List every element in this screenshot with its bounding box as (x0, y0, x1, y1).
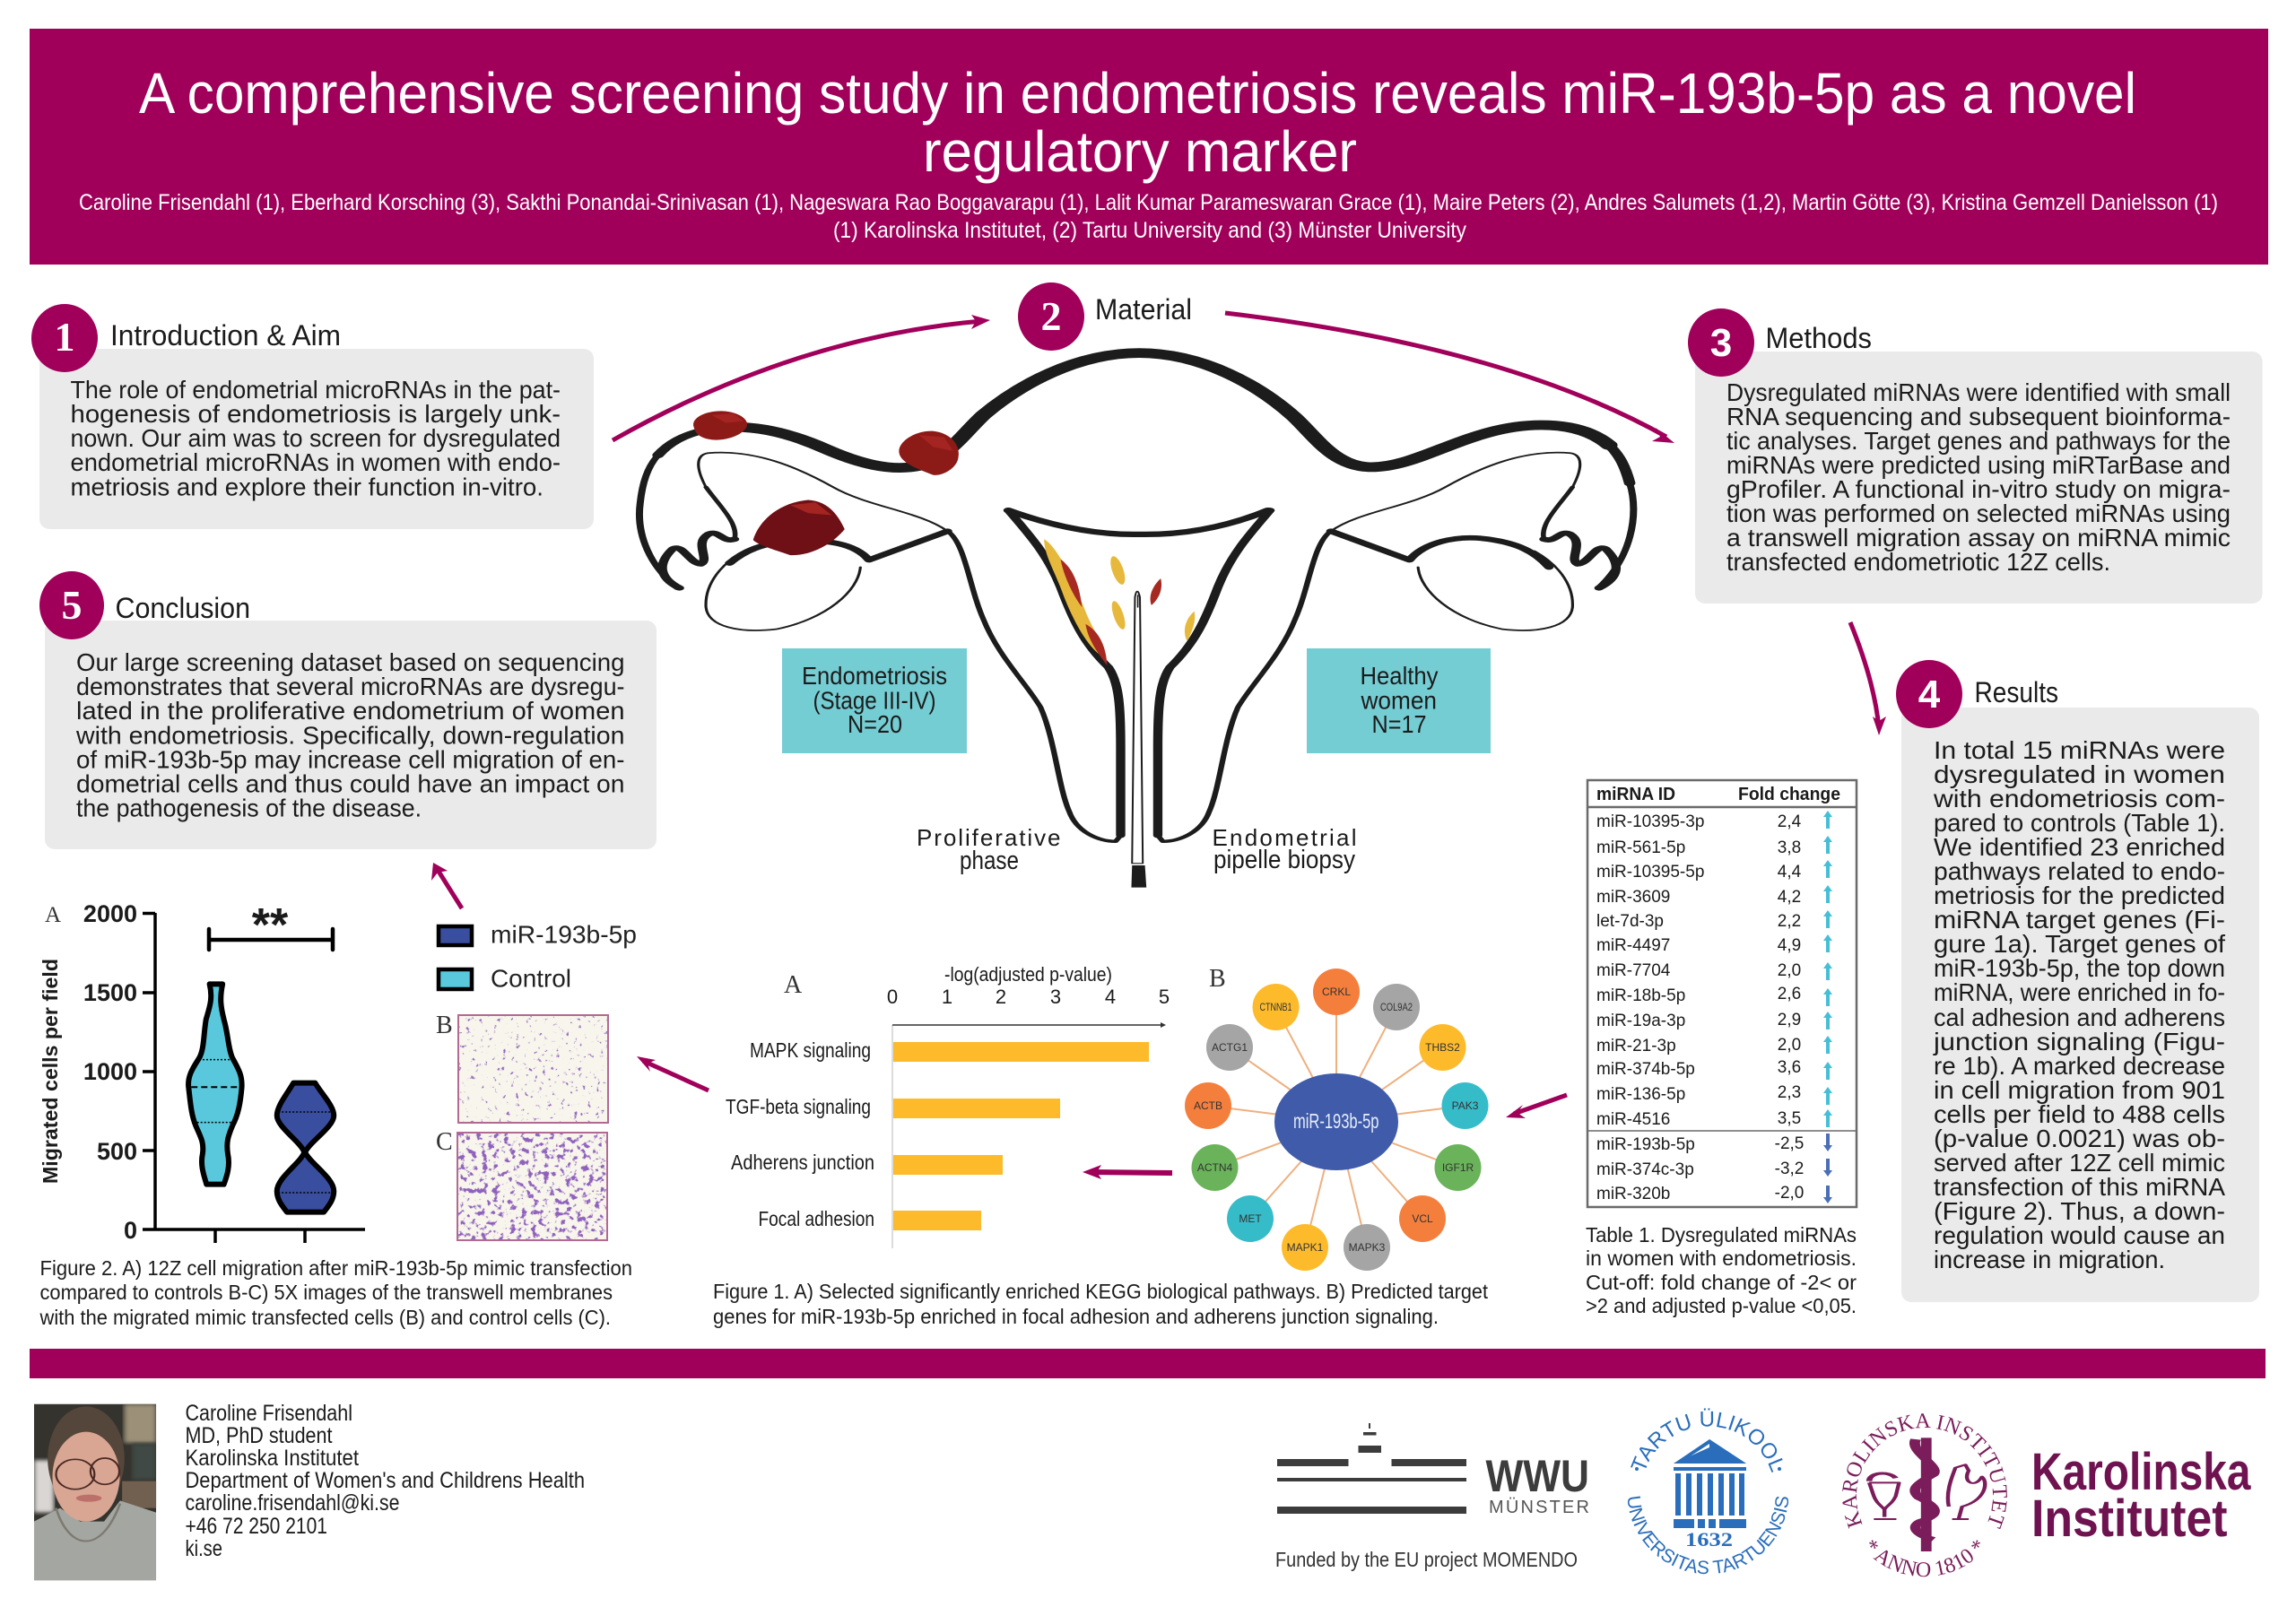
results text: miRNA target genes (Fi- (1934, 906, 2225, 934)
conclusion text: with endometriosis. Specifically, down-regulation (75, 721, 624, 750)
legend: miR-193b-5p (491, 920, 637, 949)
results text: with endometriosis com- (1933, 785, 2225, 812)
network hub (1274, 1073, 1398, 1170)
number badge 5: 5 (61, 582, 83, 628)
authors and affiliations: (1) Karolinska Institutet, (2) Tartu University and (3) Münster University (833, 218, 1466, 243)
logo: Karolinska Institutet seal: KAROLINSKA INSTITUTET (1842, 1413, 2007, 1530)
axis title: -log(adjusted p-value) (944, 963, 1112, 986)
membrane image B (436, 1012, 608, 1123)
gene node PAK3 (1442, 1082, 1489, 1129)
conclusion text: the pathogenesis of the disease. (76, 795, 422, 822)
gene node CRKL (1313, 969, 1360, 1015)
gene node ACTN4 (1191, 1144, 1238, 1191)
introduction text: metriosis and explore their function in-vitro. (70, 473, 544, 500)
table rows: 2,3 (1778, 1083, 1801, 1102)
conclusion text: lated in the proliferative endometrium of women (76, 697, 624, 725)
methods text (1726, 378, 2231, 576)
logo: WWU Münster: MÜNSTER (1489, 1498, 1589, 1517)
results text: miRNA, were enriched in fo- (1934, 978, 2225, 1006)
table rows: miR-193b-5p (1596, 1135, 1695, 1154)
logo: Karolinska Institutet seal (1842, 1413, 2007, 1577)
number badge 4: 4 (1918, 673, 1941, 717)
gene node VCL (1399, 1195, 1446, 1242)
network: miR-193b-5p target genes (1185, 965, 1489, 1271)
gene node VCL: VCL (1412, 1212, 1433, 1225)
figure 2 caption: compared to controls B-C) 5X images of the transwell membranes (39, 1281, 613, 1304)
header panel (30, 29, 2268, 265)
results text: pathways related to endo- (1934, 857, 2225, 885)
table rows: 2,4 (1778, 812, 1802, 831)
results text: (p-value 0.0021) was ob- (1934, 1125, 2225, 1152)
results text: re 1b). A marked decrease (1934, 1052, 2225, 1080)
results text: metriosis for the predicted (1934, 882, 2225, 909)
pipelle (1131, 591, 1146, 888)
down-regulation arrows (1823, 1134, 1832, 1203)
introduction text: The role of endometrial microRNAs in the pat- (70, 376, 561, 404)
table caption: Cut-off: fold change of -2< or (1586, 1271, 1857, 1294)
figure 2 caption (39, 1256, 632, 1329)
footer band (30, 1349, 2266, 1378)
contact details: +46 72 250 2101 (185, 1514, 327, 1539)
box: healthy group (1307, 648, 1491, 753)
conclusion text: of miR-193b-5p may increase cell migration of en- (76, 746, 624, 773)
box: healthy group: women (1361, 687, 1437, 714)
y axis labels: 2000 (83, 900, 137, 927)
results text: junction signaling (Figu- (1933, 1028, 2225, 1055)
figure 1: KEGG pathways and target genes (713, 963, 1489, 1328)
y axis labels: 1000 (83, 1058, 137, 1085)
violin chart (39, 899, 365, 1244)
gene node THBS2 (1419, 1024, 1465, 1071)
gene node CTNNB1 (1252, 984, 1299, 1030)
table rows: miR-3609 (1596, 888, 1670, 907)
axis scale: 5 (1159, 986, 1170, 1008)
gene node IGF1R: IGF1R (1442, 1161, 1474, 1174)
number badge 2 (1018, 282, 1084, 351)
number badge 5 (39, 571, 104, 639)
gene node ACTN4: ACTN4 (1197, 1161, 1232, 1174)
results text: In total 15 miRNAs were (1934, 736, 2225, 764)
label: proliferative phase: Proliferative (917, 824, 1060, 851)
box: endometriosis group (782, 648, 967, 753)
membrane image C: C (436, 1128, 453, 1156)
logo: Karolinska Institutet wordmark: Institutet (2031, 1490, 2228, 1548)
heading: results: Results (1975, 676, 2058, 708)
table caption: Table 1. Dysregulated miRNAs (1586, 1223, 1857, 1247)
methods text: Dysregulated miRNAs were identified with small (1726, 378, 2231, 406)
pathway labels: Focal adhesion (759, 1207, 874, 1230)
table caption (1586, 1223, 1857, 1317)
axis scale: 4 (1105, 986, 1116, 1008)
contact details: Caroline Frisendahl (185, 1401, 352, 1426)
photo: presenting author (34, 1404, 158, 1580)
conclusion text: demonstrates that several microRNAs are dysregu- (76, 673, 624, 700)
results text: gure 1a). Target genes of (1934, 930, 2225, 958)
table rows (1596, 812, 1804, 1203)
miR-193b-5p violin (277, 1083, 334, 1212)
violin chart: A (45, 903, 61, 927)
arrow: table to network (1506, 1095, 1567, 1118)
control violin (188, 984, 242, 1185)
table rows: 4,4 (1778, 863, 1802, 882)
funding note: Funded by the EU project MOMENDO (1275, 1548, 1578, 1571)
results text: cal adhesion and adherens (1934, 1003, 2225, 1031)
table rows: miR-7704 (1596, 961, 1671, 980)
panel: introduction and aim (31, 304, 594, 529)
methods text: a transwell migration assay on miRNA mimic (1726, 524, 2231, 552)
gene node COL9A2 (1373, 984, 1420, 1030)
gene node THBS2: THBS2 (1425, 1041, 1460, 1054)
pathway labels: Adherens junction (731, 1151, 874, 1174)
panel: methods (1688, 308, 2262, 604)
axis title: Migrated cells per field (39, 959, 62, 1184)
results text: in cell migration from 901 (1934, 1076, 2225, 1104)
gene node ACTB (1185, 1082, 1231, 1129)
label: proliferative phase (917, 824, 1060, 875)
table rows: 2,9 (1778, 1011, 1801, 1029)
gene node MAPK3: MAPK3 (1349, 1241, 1386, 1254)
axis scale: 3 (1050, 986, 1061, 1008)
legend: Control (491, 965, 571, 992)
number badge 2: 2 (1040, 293, 1062, 339)
gene node ACTG1: ACTG1 (1212, 1041, 1248, 1054)
contact details: caroline.frisendahl@ki.se (185, 1490, 400, 1516)
figure 1 caption: genes for miR-193b-5p enriched in focal adhesion and adherens junction signaling. (713, 1305, 1439, 1328)
table rows: -3,2 (1775, 1160, 1804, 1178)
number badge 1: 1 (54, 314, 75, 360)
significance bar (209, 899, 333, 951)
pathway labels (726, 1038, 874, 1230)
contact details: ki.se (185, 1536, 222, 1561)
methods text: tic analyses. Target genes and pathways for the (1726, 427, 2231, 455)
gene node MAPK1: MAPK1 (1287, 1241, 1324, 1254)
label: proliferative phase: phase (960, 847, 1019, 875)
methods text: transfected endometriotic 12Z cells. (1726, 548, 2110, 576)
contact details: Karolinska Institutet (185, 1446, 359, 1471)
gene node ACTB: ACTB (1194, 1099, 1222, 1112)
arrow: figure 1 to figure 2 (637, 1056, 709, 1090)
y axis labels: 1500 (83, 979, 137, 1006)
heading: methods: Methods (1765, 322, 1872, 354)
table rows: miR-4497 (1596, 936, 1670, 955)
label: endometrial pipelle biopsy: pipelle biopsy (1213, 846, 1355, 874)
table rows: let-7d-3p (1596, 912, 1664, 931)
results text: pared to controls (Table 1). (1934, 809, 2225, 837)
logo: Karolinska Institutet wordmark (2031, 1443, 2251, 1548)
box: endometriosis group: Endometriosis (802, 662, 947, 690)
methods text: RNA sequencing and subsequent bioinforma- (1726, 403, 2231, 430)
table rows: 2,0 (1778, 961, 1801, 980)
panel: material (639, 282, 1633, 888)
conclusion text: Our large screening dataset based on sequencing (76, 648, 624, 676)
gene node MET (1227, 1195, 1274, 1242)
results text: regulation would cause an (1934, 1221, 2225, 1249)
figure 2 caption: Figure 2. A) 12Z cell migration after miR-193b-5p mimic transfection (39, 1256, 632, 1280)
arrow: network to bar chart (1083, 1165, 1172, 1179)
axis scale: 1 (942, 986, 952, 1008)
results text: We identified 23 enriched (1934, 833, 2225, 861)
table rows: 2,0 (1778, 1036, 1801, 1055)
table caption: >2 and adjusted p-value <0,05. (1586, 1294, 1857, 1317)
gene node COL9A2: COL9A2 (1380, 1001, 1413, 1013)
pathway labels: TGF-beta signaling (726, 1095, 871, 1118)
arrow: methods to results (1850, 622, 1886, 735)
table header: miRNA ID (1596, 785, 1675, 804)
axis scale (887, 986, 1170, 1008)
logo: University of Tartu seal: UNIVERSITAS TARTUENSIS (1627, 1496, 1788, 1575)
box: healthy group: N=17 (1372, 710, 1426, 738)
membrane image C (436, 1128, 607, 1240)
logo: Karolinska Institutet seal: * ANNO 1810 * (1869, 1540, 1980, 1577)
label: endometrial pipelle biopsy (1213, 824, 1356, 874)
axis scale: 0 (887, 986, 898, 1008)
results text: miR-193b-5p, the top down (1934, 954, 2225, 982)
table frame (1587, 780, 1857, 1207)
arrow: figure 2 to conclusion (431, 863, 462, 908)
up-regulation arrows (1823, 811, 1832, 1127)
table caption: in women with endometriosis. (1586, 1247, 1857, 1270)
table rows: miR-4516 (1596, 1110, 1670, 1129)
network edges (1208, 992, 1465, 1247)
pathway labels: MAPK signaling (750, 1038, 871, 1062)
table rows: miR-19a-3p (1596, 1012, 1685, 1030)
heading: conclusion: Conclusion (115, 592, 250, 624)
gene node MAPK3 (1344, 1224, 1390, 1271)
logo: University of Tartu seal: 1632 (1685, 1528, 1733, 1551)
logo: University of Tartu seal (1627, 1408, 1788, 1575)
table rows: 3,6 (1778, 1058, 1801, 1077)
methods text: tion was performed on selected miRNAs using (1726, 499, 2231, 527)
gene node MAPK1 (1282, 1224, 1328, 1271)
table rows: miR-21-3p (1596, 1037, 1676, 1055)
bars (893, 1042, 1149, 1230)
conclusion text (75, 648, 624, 822)
table rows: 4,9 (1778, 936, 1801, 955)
table rows: -2,5 (1775, 1134, 1804, 1153)
contact details (185, 1401, 585, 1561)
table rows: 4,2 (1778, 888, 1801, 907)
gene node PAK3: PAK3 (1452, 1099, 1479, 1112)
box: healthy group: Healthy (1360, 662, 1439, 690)
network: miR-193b-5p target genes: B (1209, 965, 1226, 993)
logo: WWU Münster (1277, 1423, 1589, 1517)
gene node ACTG1 (1206, 1024, 1253, 1071)
network hub: miR-193b-5p (1293, 1109, 1379, 1133)
bar chart: enriched pathways (726, 963, 1170, 1248)
results text: cells per field to 488 cells (1934, 1100, 2225, 1128)
table rows: -2,0 (1775, 1184, 1804, 1203)
authors and affiliations (79, 190, 2218, 243)
heading: introduction and aim: Introduction & Aim (110, 319, 341, 352)
table rows: miR-10395-5p (1596, 863, 1704, 882)
table rows: 3,8 (1778, 838, 1801, 857)
axes and ticks (143, 913, 365, 1243)
illustration: uterus with endometriotic lesions and pipelle (639, 353, 1633, 888)
results text: (Figure 2). Thus, a down- (1934, 1197, 2225, 1225)
figure 2 caption: with the migrated mimic transfected cells (B) and control cells (C). (39, 1306, 611, 1329)
results text: served after 12Z cell mimic (1934, 1149, 2225, 1177)
table rows: miR-10395-3p (1596, 812, 1704, 831)
table header (1587, 785, 1857, 807)
introduction text: nown. Our aim was to screen for dysregulated (70, 424, 561, 452)
y axis labels: 0 (124, 1217, 137, 1244)
endometriotic lesions (693, 411, 959, 555)
y axis labels: 500 (97, 1138, 137, 1165)
table rows: miR-561-5p (1596, 838, 1685, 857)
number badge 4 (1896, 660, 1962, 728)
endometrial cells (1044, 539, 1195, 665)
heading: material: Material (1095, 293, 1192, 326)
gene node IGF1R (1435, 1144, 1482, 1191)
title: regulatory marker (923, 119, 1357, 184)
table rows: miR-374c-3p (1596, 1160, 1694, 1179)
logo: University of Tartu seal: TARTU ÜLIKOOL (1631, 1408, 1783, 1472)
number badge 3 (1688, 308, 1754, 377)
results text (1933, 736, 2225, 1273)
logo: WWU Münster: WWU (1485, 1451, 1589, 1501)
gene node CTNNB1: CTNNB1 (1259, 1001, 1292, 1013)
panel: conclusion (39, 571, 657, 849)
results text: dysregulated in women (1934, 760, 2225, 788)
introduction text: hogenesis of endometriosis is largely unk- (70, 400, 561, 428)
title: A comprehensive screening study in endometriosis reveals miR-193b-5p as a novel (139, 61, 2136, 126)
number badge 1 (31, 304, 98, 372)
figure 1 caption: Figure 1. A) Selected significantly enriched KEGG biological pathways. B) Predicted target (713, 1280, 1489, 1303)
conclusion text: dometrial cells and thus could have an impact on (76, 769, 624, 798)
results text: increase in migration. (1934, 1246, 2165, 1273)
logo: Karolinska Institutet wordmark: Karolinska (2031, 1443, 2251, 1501)
significance bar: ** (252, 899, 289, 951)
table rows: 2,6 (1778, 985, 1801, 1003)
table rows: miR-18b-5p (1596, 986, 1685, 1005)
methods text: gProfiler. A functional in-vitro study on migra- (1726, 475, 2231, 503)
legend (439, 920, 637, 992)
methods text: miRNAs were predicted using miRTarBase and (1726, 451, 2231, 479)
membrane image B: B (436, 1012, 453, 1039)
introduction text (70, 376, 561, 500)
table rows: miR-136-5p (1596, 1085, 1685, 1104)
gene node CRKL: CRKL (1322, 986, 1351, 998)
introduction text: endometrial microRNAs in women with endo- (70, 448, 561, 476)
label: endometrial pipelle biopsy: Endometrial (1213, 824, 1356, 851)
table rows: miR-374b-5p (1596, 1060, 1695, 1079)
arrow: introduction to material (613, 315, 990, 440)
axis scale: 2 (996, 986, 1006, 1008)
bar chart: enriched pathways: A (784, 971, 803, 999)
arrow: material to methods (1225, 313, 1674, 443)
table rows: 3,5 (1778, 1109, 1801, 1128)
gene node MET: MET (1239, 1212, 1262, 1225)
panel: results (1896, 660, 2259, 1302)
table header: Fold change (1738, 785, 1840, 804)
box: endometriosis group: N=20 (848, 710, 902, 738)
table 1: dysregulated miRNAs (1586, 780, 1857, 1317)
title (139, 61, 2136, 184)
contact details: Department of Women's and Childrens Health (185, 1468, 585, 1493)
contact details: MD, PhD student (185, 1423, 333, 1448)
axis lines (892, 1022, 1166, 1248)
y axis labels (83, 900, 137, 1244)
table rows: miR-320b (1596, 1185, 1670, 1203)
box: endometriosis group: (Stage III-IV) (813, 687, 936, 714)
table rows: 2,2 (1778, 912, 1801, 931)
results text: transfection of this miRNA (1934, 1173, 2225, 1201)
figure 2: migration violin plot and membrane images (39, 899, 637, 1329)
figure 1 caption (713, 1280, 1489, 1328)
number badge 3: 3 (1710, 321, 1732, 365)
